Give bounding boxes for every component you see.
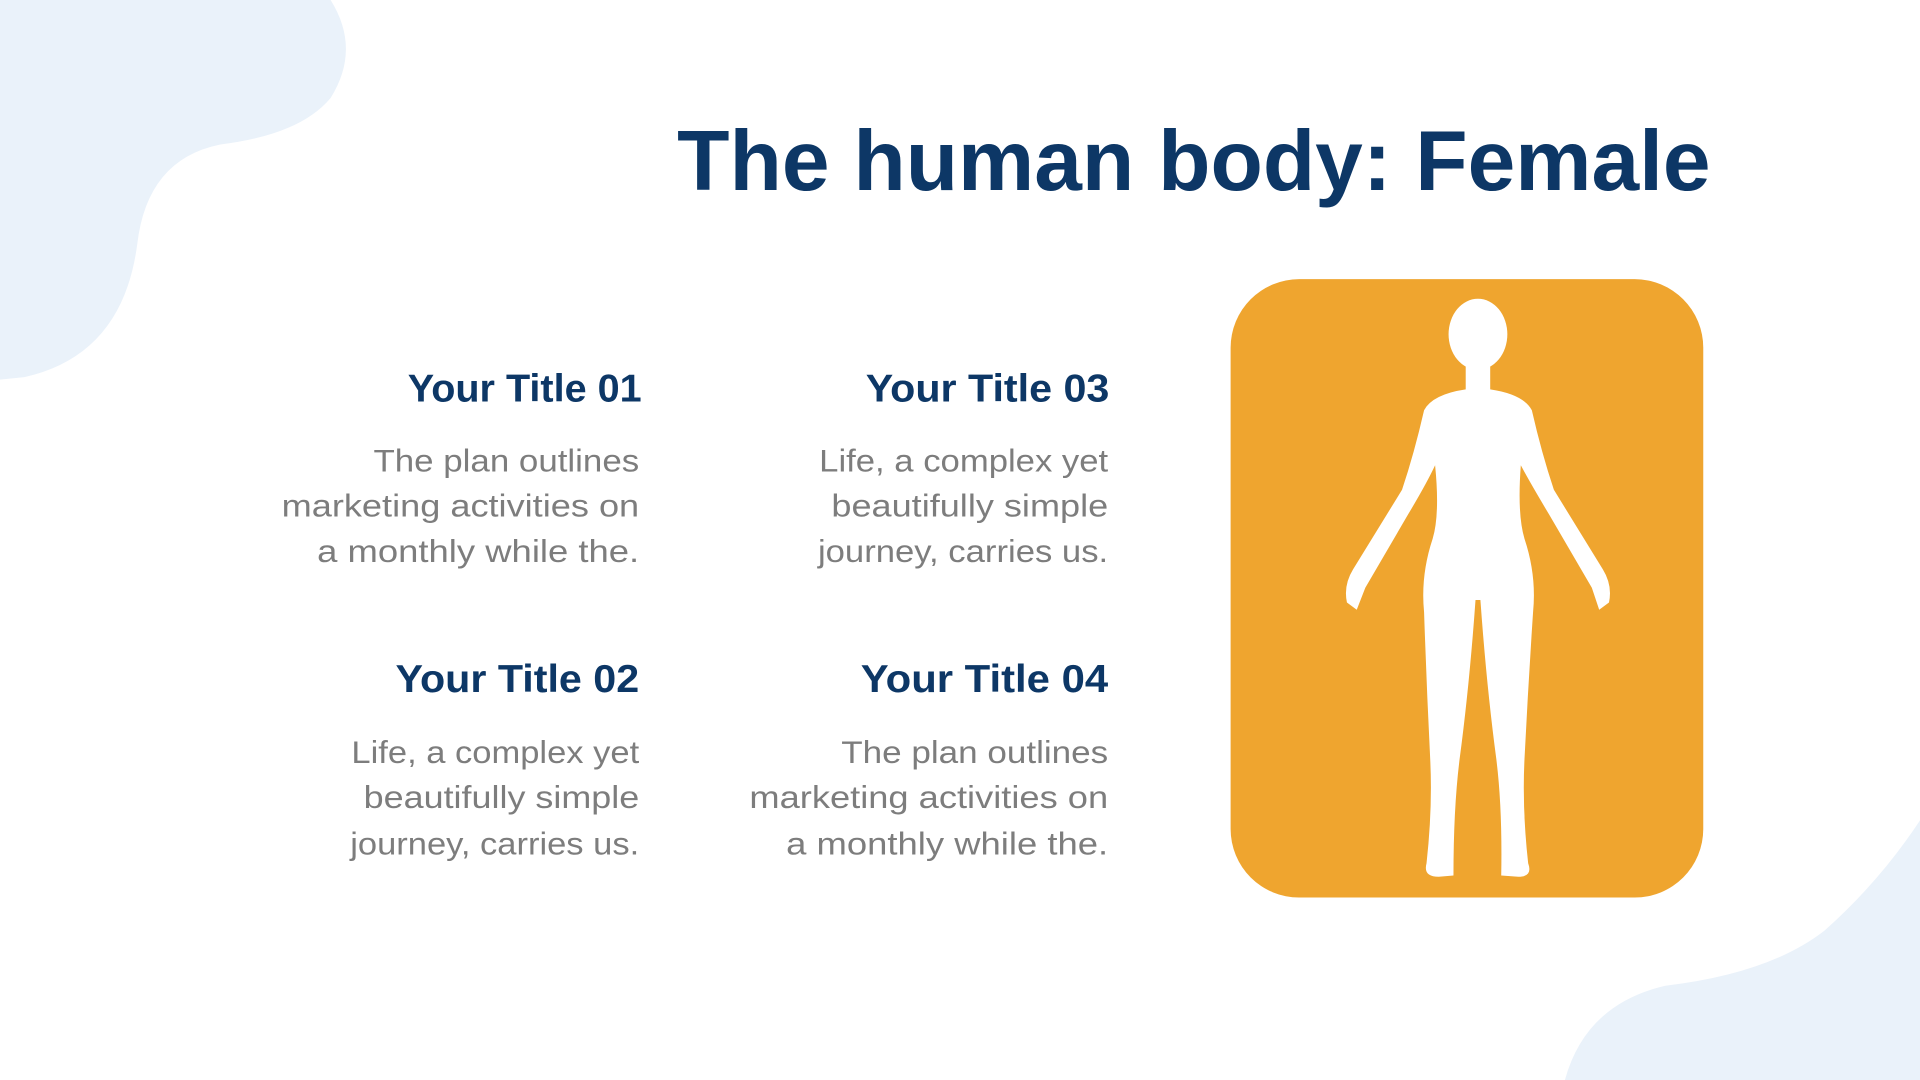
block: title 01 [282, 368, 642, 569]
title: The human body: Female [677, 113, 1711, 209]
block: title 01: marketing activities on [282, 488, 639, 524]
decorative blob: bottom-right [1565, 820, 1920, 1080]
block: title 01: The plan outlines [373, 442, 639, 478]
block: title 02 [349, 658, 639, 862]
block: title 01: a monthly while the. [317, 533, 639, 569]
block: title 02: journey, carries us. [349, 826, 639, 862]
block: title 01: Your Title 01 [408, 368, 642, 411]
block: title 02: beautifully simple [364, 779, 639, 815]
panel: orange figure card [1231, 279, 1703, 898]
block: title 03 [817, 368, 1109, 569]
block: title 03: journey, carries us. [817, 533, 1108, 569]
block: title 02: Your Title 02 [396, 658, 639, 701]
block: title 03: Life, a complex yet [819, 442, 1108, 478]
block: title 04: marketing activities on [749, 779, 1108, 815]
icon: female silhouette [1346, 299, 1610, 877]
decorative blob: top-left [0, 0, 346, 380]
block: title 04 [749, 658, 1108, 862]
block: title 04: The plan outlines [841, 734, 1108, 770]
block: title 03: beautifully simple [831, 488, 1108, 524]
block: title 04: a monthly while the. [786, 826, 1108, 862]
block: title 02: Life, a complex yet [351, 734, 639, 770]
block: title 04: Your Title 04 [861, 658, 1108, 701]
block: title 03: Your Title 03 [866, 368, 1109, 411]
